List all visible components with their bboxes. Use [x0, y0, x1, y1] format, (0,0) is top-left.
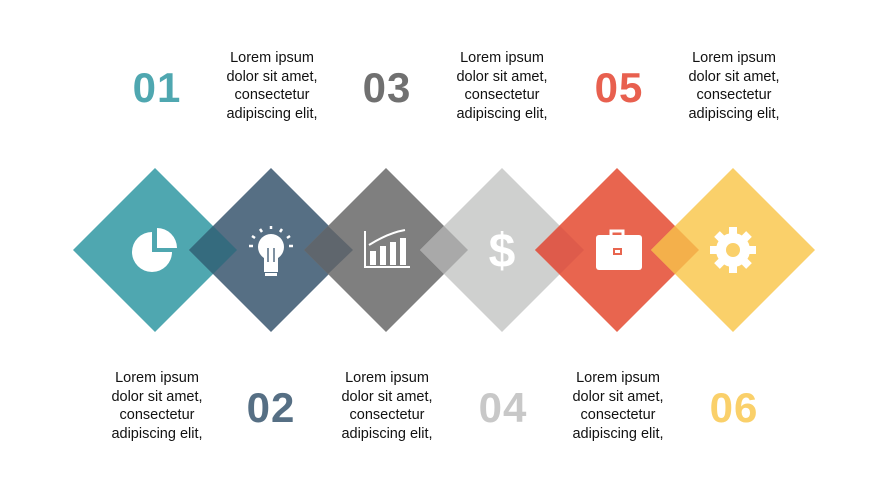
- diamond 6 yellow: [651, 168, 815, 332]
- text 4: dolor sit amet,: [341, 389, 433, 405]
- text 4: [341, 370, 433, 442]
- text 2: Lorem ipsum: [115, 370, 199, 386]
- icon: light bulb: [249, 226, 293, 276]
- diamond 3 gray: [304, 168, 468, 332]
- text 5: dolor sit amet,: [688, 69, 780, 85]
- icon: pie chart: [132, 228, 177, 272]
- text 5: adipiscing elit,: [688, 106, 780, 122]
- text 4: consectetur: [350, 407, 424, 423]
- diamond 5 red: [535, 168, 699, 332]
- text 1: Lorem ipsum: [230, 50, 314, 66]
- overlaps: [189, 226, 699, 274]
- text 3: dolor sit amet,: [456, 69, 548, 85]
- text 1: adipiscing elit,: [226, 106, 318, 122]
- number 01: 01: [133, 64, 181, 111]
- diamond 2 slate: [189, 168, 353, 332]
- text 3: adipiscing elit,: [456, 106, 548, 122]
- text 6: adipiscing elit,: [572, 426, 664, 442]
- diamond 4 light gray: [420, 168, 584, 332]
- text 6: dolor sit amet,: [572, 389, 664, 405]
- text 5: Lorem ipsum: [692, 50, 776, 66]
- text 4: Lorem ipsum: [345, 370, 429, 386]
- text 5: consectetur: [697, 87, 771, 103]
- text 1: consectetur: [235, 87, 309, 103]
- icon: dollar: $: [489, 225, 516, 278]
- text 5: [688, 50, 780, 122]
- text 1: dolor sit amet,: [226, 69, 318, 85]
- text 4: adipiscing elit,: [341, 426, 433, 442]
- diamond 1 teal: [73, 168, 237, 332]
- number 03: 03: [363, 64, 411, 111]
- text 3: Lorem ipsum: [460, 50, 544, 66]
- icon: bar chart: [365, 230, 410, 267]
- number 05: 05: [595, 64, 643, 111]
- text 2: consectetur: [120, 407, 194, 423]
- text 1: [226, 50, 318, 122]
- text 3: [456, 50, 548, 122]
- text 3: consectetur: [465, 87, 539, 103]
- number 04: 04: [479, 384, 527, 431]
- text 6: [572, 370, 664, 442]
- text 2: dolor sit amet,: [111, 389, 203, 405]
- text 2: [111, 370, 203, 442]
- icon: briefcase: [596, 231, 642, 270]
- text 6: Lorem ipsum: [576, 370, 660, 386]
- number 02: 02: [247, 384, 295, 431]
- text 6: consectetur: [581, 407, 655, 423]
- icon: gear: [710, 227, 756, 273]
- text 2: adipiscing elit,: [111, 426, 203, 442]
- number 06: 06: [710, 384, 758, 431]
